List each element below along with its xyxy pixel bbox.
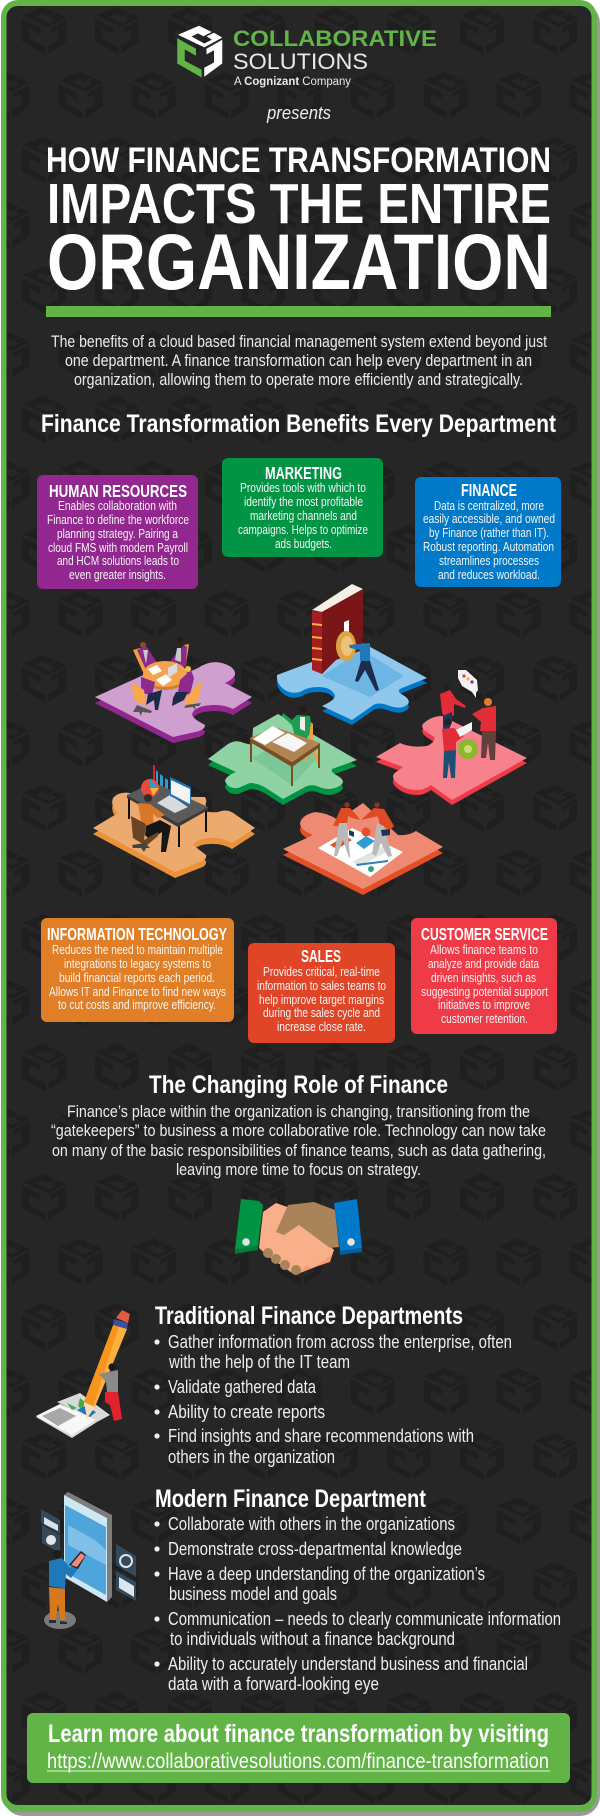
- list: modern: business model and goals: [169, 1584, 337, 1604]
- list: traditional: Find insights and share recommendations with: [168, 1426, 474, 1446]
- heading: traditional: Traditional Finance Departments: [155, 1302, 463, 1330]
- intro text: [51, 332, 547, 389]
- panel: information technology: Allows IT and Finance to find new ways: [49, 985, 226, 999]
- figures: three colleagues: [440, 683, 496, 778]
- panel: human resources: and HCM solutions leads to: [57, 554, 179, 568]
- panel: sales: help improve target margins: [259, 993, 384, 1007]
- panel: customer service: initiatives to improve: [438, 998, 530, 1012]
- panel: finance: FINANCE: [461, 480, 517, 500]
- figure: person at laptop: [127, 765, 208, 852]
- panel: information technology: Reduces the need to maintain multiple: [52, 943, 223, 957]
- list: modern: [154, 1514, 561, 1694]
- heading: modern: Modern Finance Department: [155, 1485, 427, 1513]
- list: traditional: Gather information from across the enterprise, often: [168, 1332, 512, 1352]
- list: modern: data with a forward-looking eye: [168, 1674, 379, 1694]
- speech bubble: [458, 670, 478, 698]
- logo wordmark: COLLABORATIVE: [233, 26, 437, 51]
- list: modern: Ability to accurately understand business and financial: [168, 1654, 528, 1674]
- title: [46, 140, 551, 306]
- puzzle: human resources piece: [95, 637, 252, 743]
- panel: marketing: Provides tools with which to: [240, 481, 366, 495]
- panel: information technology: build financial reports each period.: [59, 971, 215, 985]
- list: modern: to individuals without a finance background: [170, 1629, 455, 1649]
- panel: information technology: INFORMATION TECHNOLOGY: [47, 924, 227, 944]
- panel: human resources: Enables collaboration with: [58, 499, 177, 513]
- panel: customer service: driven insights, such as: [431, 971, 536, 985]
- changing role text: leaving more time to focus on strategy.: [176, 1160, 421, 1179]
- panel: sales: Provides critical, real-time: [263, 965, 380, 979]
- panel: sales: increase close rate.: [277, 1020, 366, 1034]
- puzzle: customer service piece: [376, 670, 527, 805]
- logo wordmark: SOLUTIONS: [233, 49, 368, 74]
- panel: sales: SALES: [301, 946, 341, 966]
- list: modern: Demonstrate cross-departmental knowledge: [168, 1539, 462, 1559]
- panel: customer service: analyze and provide data: [428, 957, 539, 971]
- changing role text: [51, 1102, 546, 1179]
- panel: finance: [415, 477, 561, 587]
- panel: sales: [248, 943, 395, 1043]
- panel: human resources: even greater insights.: [69, 568, 166, 582]
- panel: marketing: MARKETING: [265, 463, 342, 483]
- panel: marketing: campaigns. Helps to optimize: [238, 523, 368, 537]
- list: traditional: Ability to create reports: [168, 1402, 325, 1422]
- panel: customer service: customer retention.: [441, 1012, 528, 1026]
- list: traditional: [154, 1332, 512, 1467]
- icon: pencil and person: [36, 1310, 130, 1438]
- icon: phone and person: [41, 1492, 136, 1629]
- list: traditional: Validate gathered data: [168, 1377, 317, 1397]
- puzzle: information technology piece: [93, 765, 255, 878]
- panel: human resources: planning strategy. Pairing a: [57, 527, 178, 541]
- panel: sales: information to sales teams to: [257, 979, 386, 993]
- icon: cube logo: [177, 26, 222, 78]
- logo: [177, 26, 437, 88]
- panel: customer service: CUSTOMER SERVICE: [421, 924, 548, 944]
- panel: marketing: identify the most profitable: [244, 495, 363, 509]
- intro text: organization, allowing them to operate more efficiently and strategically.: [74, 370, 523, 389]
- presents: presents: [266, 103, 331, 123]
- figure: meeting table: [131, 637, 202, 716]
- panel: finance: by Finance (rather than IT).: [429, 526, 549, 540]
- list: traditional: others in the organization: [168, 1447, 335, 1467]
- heading: changing role: The Changing Role of Finance: [149, 1071, 448, 1099]
- panel: finance: Data is centralized, more: [434, 499, 544, 513]
- panel: information technology: to cut costs and improve efficiency.: [58, 998, 216, 1012]
- panel: finance: Robust reporting. Automation: [423, 540, 554, 554]
- panel: human resources: Finance to define the workforce: [47, 513, 189, 527]
- figures: contract handshake: [318, 802, 403, 877]
- panel: customer service: Allows finance teams to: [430, 943, 538, 957]
- panel: finance: streamlines processes: [439, 554, 539, 568]
- panel: customer service: suggesting potential support: [421, 985, 548, 999]
- panel: information technology: [41, 918, 234, 1022]
- panel: human resources: cloud FMS with modern Payroll: [48, 541, 188, 555]
- panel: marketing: ads budgets.: [275, 537, 332, 551]
- figure: person at desk: [250, 705, 320, 786]
- panel: human resources: HUMAN RESOURCES: [49, 481, 187, 501]
- panel: marketing: [222, 458, 383, 557]
- icon: handshake: [235, 1199, 362, 1275]
- panel: human resources: [37, 475, 198, 589]
- panel: finance: easily accessible, and owned: [423, 512, 555, 526]
- list: modern: Collaborate with others in the organizations: [168, 1514, 455, 1534]
- panel: finance: and reduces workload.: [438, 568, 540, 582]
- panel: customer service: [411, 918, 557, 1034]
- list: traditional: with the help of the IT team: [168, 1352, 350, 1372]
- title rule: [46, 306, 551, 317]
- panel: sales: during the sales cycle and: [263, 1006, 380, 1020]
- puzzle: marketing piece: [208, 705, 357, 805]
- logo wordmark: [233, 26, 437, 88]
- icon: book with door: [312, 584, 363, 674]
- panel: information technology: integrations to legacy systems to: [64, 957, 211, 971]
- puzzle: sales piece: [283, 802, 443, 895]
- list: modern: Have a deep understanding of the organization’s: [168, 1564, 485, 1584]
- panel: marketing: marketing channels and: [250, 509, 357, 523]
- puzzle: finance piece: [277, 584, 427, 725]
- call to action: [27, 1713, 570, 1783]
- figure: person pushing coin: [349, 637, 379, 691]
- logo wordmark: A Cognizant Company: [234, 76, 351, 88]
